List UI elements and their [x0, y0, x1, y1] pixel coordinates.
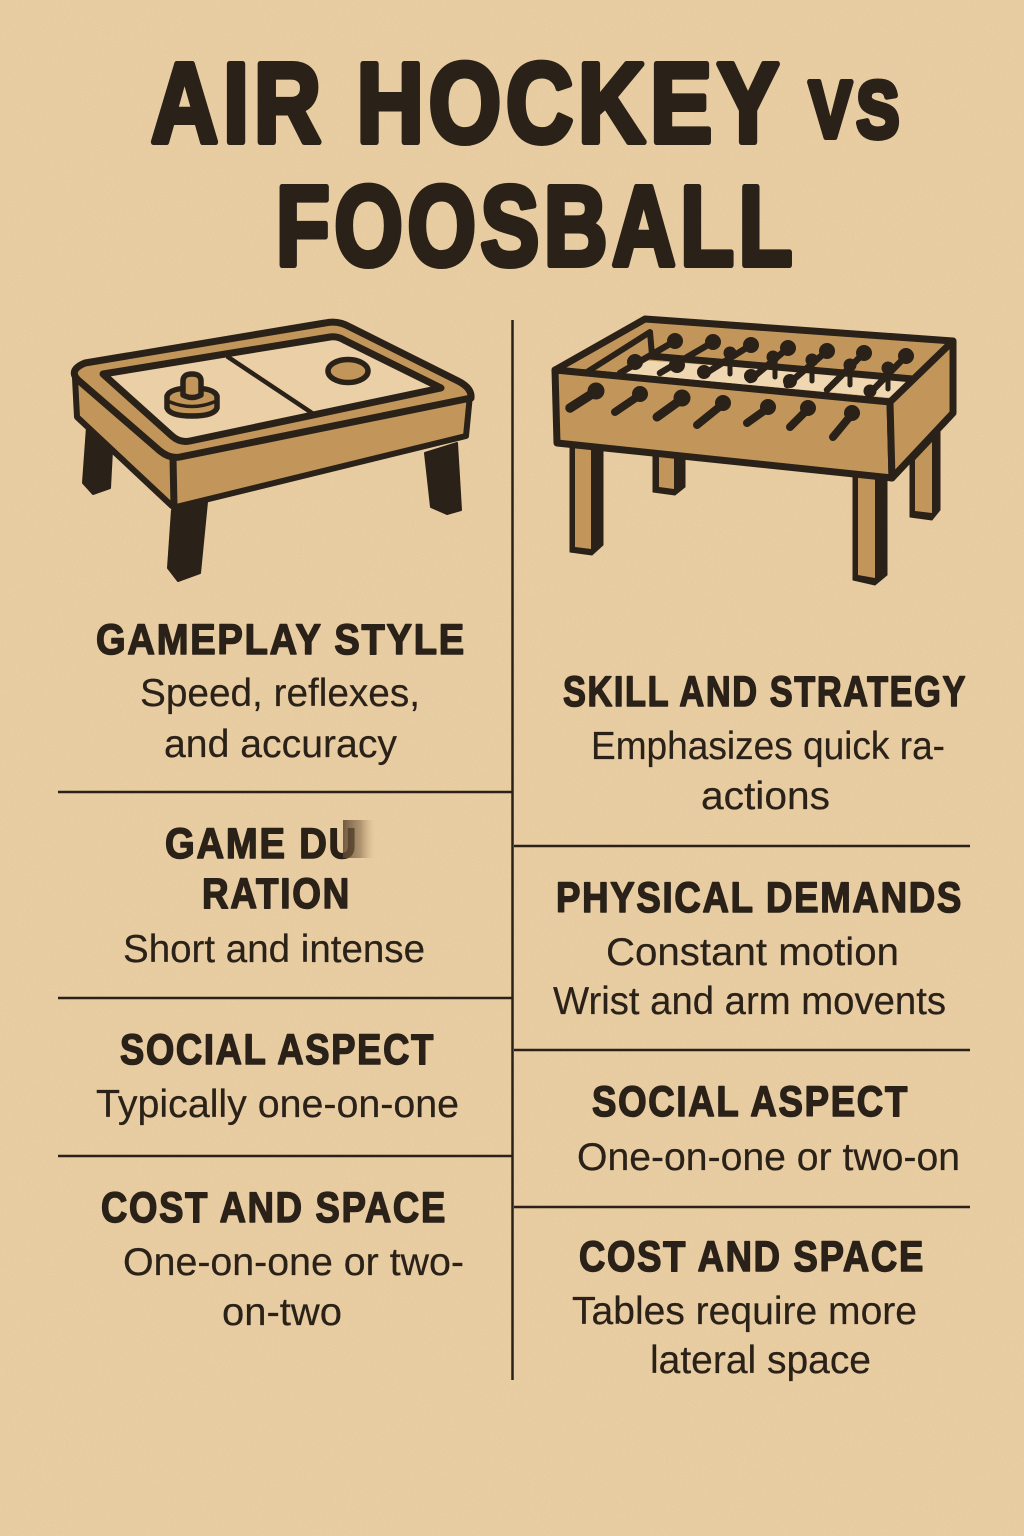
social aspect — [577, 1078, 960, 1179]
title — [151, 40, 904, 289]
skill and strategy — [563, 668, 967, 818]
icon: foosball table — [555, 319, 953, 585]
physical demands: Constant motion — [606, 931, 899, 974]
social aspect: One-on-one or two-on — [577, 1136, 960, 1179]
physical demands — [553, 874, 963, 1023]
gameplay style: and accuracy — [164, 723, 397, 766]
icon: air hockey table — [74, 322, 471, 581]
center divider — [511, 320, 514, 1380]
physical demands: PHYSICAL DEMANDS — [556, 874, 963, 922]
game duration: GAME DU — [165, 820, 358, 868]
cost and space — [101, 1184, 464, 1334]
social aspect: Typically one-on-one — [96, 1083, 459, 1126]
title: AIR HOCKEY — [151, 40, 784, 166]
game duration: Short and intense — [123, 928, 425, 971]
cost and space: Tables require more — [572, 1290, 917, 1333]
title: VS — [809, 65, 904, 154]
cost and space: One-on-one or two- — [123, 1241, 464, 1284]
physical demands: Wrist and arm movents — [553, 980, 946, 1023]
game duration: RATION — [202, 870, 351, 918]
gameplay style: GAMEPLAY STYLE — [96, 616, 466, 664]
cost and space: COST AND SPACE — [101, 1184, 447, 1232]
gameplay style — [96, 616, 466, 766]
cost and space: on-two — [222, 1291, 342, 1334]
social aspect: SOCIAL ASPECT — [120, 1026, 435, 1074]
social aspect: SOCIAL ASPECT — [592, 1078, 909, 1126]
game duration — [123, 820, 425, 971]
skill and strategy: actions — [701, 775, 830, 818]
cost and space — [572, 1233, 925, 1382]
skill and strategy: Emphasizes quick ra- — [591, 725, 945, 768]
panel: air hockey column — [58, 616, 512, 1334]
social aspect — [96, 1026, 459, 1126]
panel: foosball column — [514, 668, 970, 1382]
cost and space: lateral space — [650, 1339, 871, 1382]
cost and space: COST AND SPACE — [579, 1233, 925, 1281]
title: FOOSBALL — [276, 163, 797, 289]
gameplay style: Speed, reflexes, — [140, 672, 420, 715]
